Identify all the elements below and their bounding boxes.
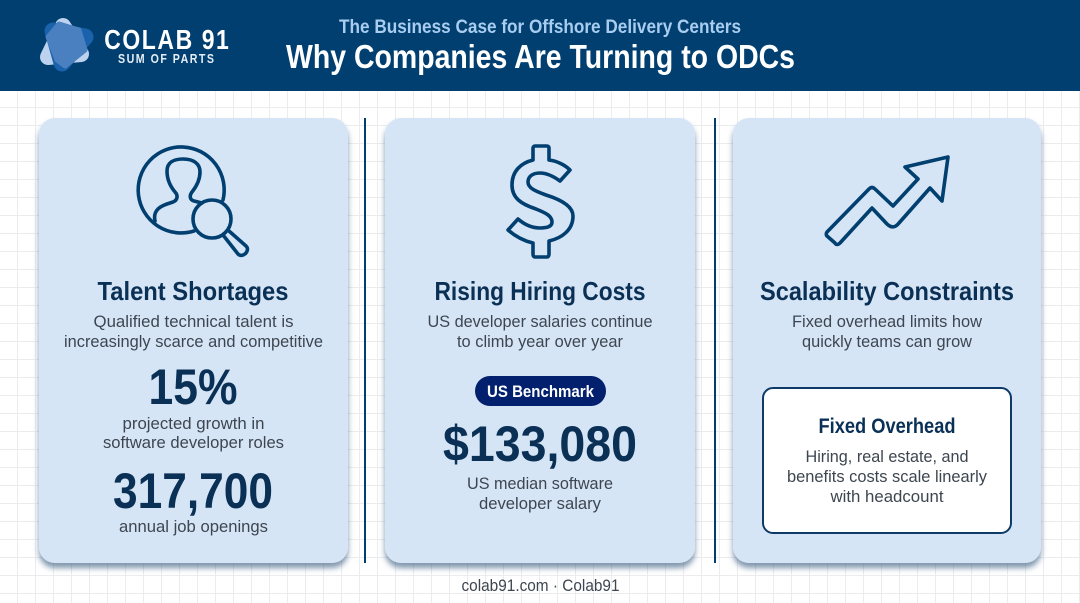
callout heading: Fixed Overhead: [818, 415, 956, 438]
callout text: benefits costs scale linearly: [787, 467, 987, 486]
stat caption: US median software: [467, 474, 613, 493]
logo mark: [48, 24, 85, 66]
logo wordmark: COLAB 91: [104, 25, 229, 56]
header band: [0, 0, 1080, 91]
description: Fixed overhead limits how: [792, 312, 983, 331]
stat: 15%: [103, 359, 284, 452]
callout text: with headcount: [830, 487, 944, 506]
stat: 317,700: 317,700: [113, 463, 273, 519]
panel: scalability constraints: [733, 118, 1041, 563]
description: [428, 312, 652, 351]
stat caption: [467, 474, 613, 513]
callout text: [787, 447, 987, 506]
callout text: Hiring, real estate, and: [806, 447, 968, 466]
subtitle: The Business Case for Offshore Delivery Centers: [339, 17, 741, 38]
icon: person with magnifier: [138, 147, 248, 255]
description: [64, 312, 323, 351]
panel: talent shortages: [39, 118, 348, 563]
description: Qualified technical talent is: [94, 312, 294, 331]
footer: colab91.com · Colab91: [462, 577, 620, 595]
callout: fixed overhead: [763, 388, 1011, 533]
stat caption: developer salary: [479, 494, 601, 513]
description: increasingly scarce and competitive: [64, 332, 323, 351]
stat: 15%: 15%: [148, 359, 238, 415]
description: US developer salaries continue: [428, 312, 652, 331]
heading: Rising Hiring Costs: [434, 276, 646, 306]
description: [792, 312, 983, 351]
panel: rising hiring costs: [385, 118, 695, 563]
stat: 317,700: [113, 463, 273, 536]
icon: dollar sign: [508, 146, 573, 257]
heading: Scalability Constraints: [760, 276, 1014, 306]
heading: Talent Shortages: [98, 276, 288, 306]
description: to climb year over year: [457, 332, 623, 351]
icon: rising arrow: [826, 157, 948, 244]
stat: 317,700: annual job openings: [119, 517, 268, 536]
stat: 15%: software developer roles: [103, 433, 284, 452]
logo wordmark: SUM OF PARTS: [118, 52, 214, 66]
badge: US Benchmark: US Benchmark: [487, 383, 595, 401]
badge: US Benchmark: [475, 376, 606, 406]
description: quickly teams can grow: [802, 332, 973, 351]
divider: right: [714, 118, 716, 563]
divider: left: [364, 118, 366, 563]
title: Why Companies Are Turning to ODCs: [286, 38, 795, 75]
stat: 15%: projected growth in: [122, 414, 264, 433]
stat: salary: $133,080: [443, 416, 637, 472]
